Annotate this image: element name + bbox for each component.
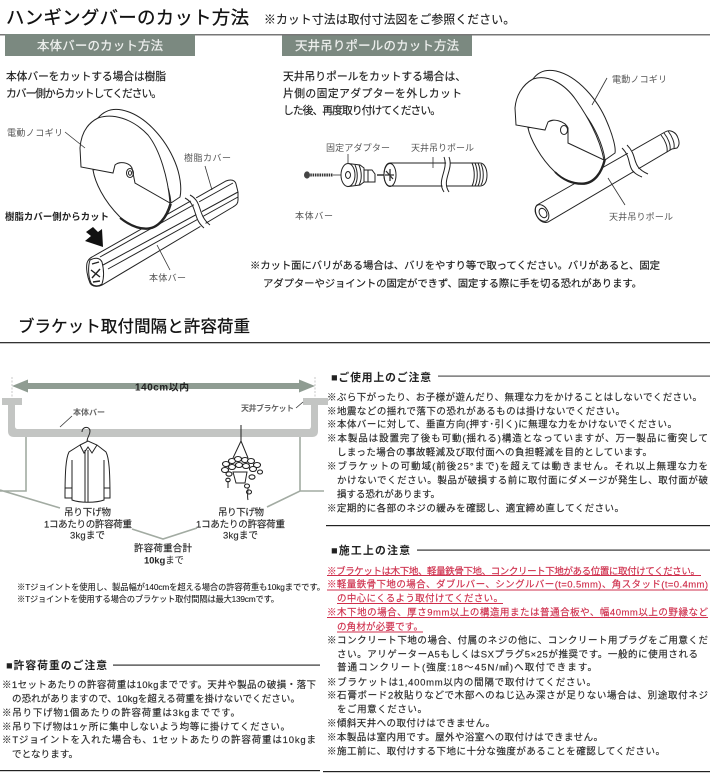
- label: ceiling pole right: [608, 178, 673, 222]
- heading: ■ご使用上のご注意: [331, 370, 431, 384]
- panel: installation cautions: ※本製品は室内用です。屋外や浴室への取付けはできません。: [327, 732, 603, 744]
- panel: load cautions: でとなります。: [12, 750, 78, 760]
- panel: load cautions: ※吊り下げ物1個あたりの許容荷重は3kgまでです。: [2, 707, 240, 719]
- label: electric saw left: [7, 128, 85, 148]
- label: main bar in diagram: [60, 407, 105, 427]
- label: item load right: 3kgまで: [223, 530, 258, 542]
- illustration: saw cutting main bar: [80, 109, 238, 286]
- label: main bar: 本体バー: [149, 272, 186, 283]
- panel: load cautions: の恐れがありますので、10kgを超える荷重を掛けないでください。: [12, 693, 300, 705]
- text block: pole cutting instruction: [283, 69, 466, 117]
- note: cut dimensions reference: ※カット寸法は取付寸法図をご参照ください。: [264, 12, 515, 26]
- label: item load right: [196, 506, 285, 542]
- pole: [384, 163, 487, 186]
- panel: installation cautions: をご用意ください。: [337, 704, 427, 716]
- panel: installation cautions: さい。アリゲーターA5もしくはSXプラグ5×25が推奨です。一般的に使用される: [337, 648, 698, 660]
- note: T joint: [17, 582, 325, 604]
- label: cut from resin cover side: 樹脂カバー側からカット: [5, 211, 109, 222]
- label: resin cover: [184, 152, 231, 190]
- heading: ■施工上の注意: [331, 543, 410, 557]
- text block: pole cutting instruction: した後、再度取り付けてください。: [283, 103, 441, 117]
- saw guard face: [80, 116, 170, 203]
- panel: load cautions: ※吊り下げ物は1ヶ所に集中しないよう均等に掛けてください。: [2, 721, 290, 733]
- label: total load: [134, 542, 192, 566]
- panel heading: ceiling pole cutting: 天井吊りポールのカット方法: [295, 38, 459, 53]
- red warnings: ※木下地の場合、厚さ9mm以上の構造用または普通合板や、幅40mm以上の野縁など: [327, 606, 708, 618]
- label: item load left: 3kgまで: [70, 530, 105, 542]
- panel: usage cautions: ※本体バーに対して、垂直方向(押す･引く)に無理な力をかけないでください。: [327, 418, 677, 430]
- panel: load cautions: [0, 658, 320, 771]
- label: item load right: 1コあたりの許容荷重: [196, 518, 285, 530]
- label: item load left: 吊り下げ物: [64, 506, 111, 518]
- blade: [528, 118, 604, 183]
- panel: load cautions: ※Tジョイントを入れた場合も、1セットあたりの許容荷重は10kgま: [2, 734, 316, 746]
- label: main bar parts: 本体バー: [295, 210, 333, 221]
- text block: bar cutting instruction: カバー側からカットしてください。: [6, 87, 162, 100]
- label: electric saw left: 電動ノコギリ: [7, 128, 63, 138]
- label: ceiling bracket: [241, 402, 303, 413]
- connector lines: [0, 437, 324, 539]
- label: item load right: 吊り下げ物: [218, 506, 264, 518]
- panel heading: bar cutting: 本体バーのカット方法: [37, 38, 163, 53]
- panel: installation cautions: ※コンクリート下地の場合、付属のネジの他に、コンクリート用プラグをご用意くだ: [327, 634, 708, 646]
- label: resin cover: 樹脂カバー: [184, 152, 231, 163]
- heading: ■許容荷重のご注意: [6, 658, 107, 672]
- panel: usage cautions: ※定期的に各部のネジの緩みを確認し、適宜締め直してください。: [327, 502, 624, 514]
- label: main bar: [149, 245, 186, 283]
- red warnings: の角材が必要です。: [337, 621, 423, 633]
- text block: bar cutting instruction: [6, 69, 166, 100]
- label: ceiling pole right: 天井吊りポール: [609, 211, 673, 222]
- adapter: [348, 164, 364, 186]
- panel: load cautions: ※1セットあたりの許容荷重は10kgまでです。天井や製品の破損・落下: [2, 679, 316, 691]
- icon: shirt on hanger: [65, 427, 110, 502]
- label: main bar in diagram: 本体バー: [73, 407, 105, 417]
- label: fixed adapter: [326, 142, 390, 164]
- text block: bar cutting instruction: 本体バーをカットする場合は樹脂: [6, 69, 166, 83]
- panel: usage cautions: かけないでください。製品が破損する前に取付面にダメージが発生し、取付面が破: [337, 474, 708, 486]
- panel: usage cautions: ※地震などの揺れで落下の恐れがあるものは掛けないでください。: [327, 406, 625, 418]
- red warnings: の中心にくるよう取付けてください。: [337, 592, 503, 604]
- panel: installation cautions: ※ブラケットは1,400mm以内の間隔で取付けてください。: [327, 676, 596, 688]
- panel: usage cautions: しまった場合の事故軽減及び取付面への負担軽減を目的としています。: [337, 446, 652, 458]
- label: total load: 10kgまで: [144, 556, 184, 566]
- note: burr warning: [250, 259, 660, 290]
- screw: [308, 174, 333, 176]
- saw guard rim: [533, 70, 615, 160]
- title: bracket spacing and load: ブラケット取付間隔と許容荷重: [18, 317, 250, 336]
- note: T joint: ※Tジョイントを使用し、製品幅が140cmを超える場合の許容荷重も10kgまでです。: [17, 582, 325, 592]
- label: electric saw right: 電動ノコギリ: [612, 74, 667, 84]
- panel: usage cautions: ※ブラケットの可動域(前後25°まで)を超えては動きません。それ以上無理な力を: [327, 460, 708, 472]
- label: ceiling bracket: 天井ブラケット: [241, 403, 294, 413]
- arrow: cut direction: [85, 227, 103, 247]
- dimension label: 140cm以内: [135, 380, 189, 394]
- diagram: bracket and bar: [2, 377, 328, 437]
- label: item load left: 1コあたりの許容荷重: [44, 518, 132, 530]
- panel: installation cautions: ※施工前に、取付けする下地に十分な強度があることを確認してください。: [327, 746, 665, 758]
- icon: hanging plant: [222, 425, 262, 500]
- blade: [93, 160, 170, 228]
- pole: [535, 131, 679, 223]
- panel: usage cautions: 損する恐れがあります。: [337, 488, 440, 500]
- panel heading: bar cutting: [5, 34, 195, 56]
- bar: [87, 180, 238, 286]
- label: item load left: [44, 506, 132, 542]
- note: burr warning: アダプターやジョイントの固定ができず、固定する際に手を切る恐れがあります。: [263, 277, 642, 290]
- saw guard face: [515, 78, 604, 160]
- gray bar and brackets: [2, 398, 328, 437]
- note: T joint: ※Tジョイントを使用する場合のブラケット取付間隔は最大139cmです。: [17, 594, 279, 604]
- bar end cap: [89, 258, 104, 286]
- label: electric saw right: [592, 74, 667, 105]
- title: hanging bar cutting: ハンギングバーのカット方法: [6, 7, 249, 28]
- label: total load: 許容荷重合計: [134, 542, 192, 554]
- red warnings: ※ブラケットは木下地、軽量鉄骨下地、コンクリート下地がある位置に取付けてください。: [327, 566, 700, 578]
- panel: installation cautions: ※石膏ボード2枚貼りなどで木部へのねじ込み深さが足りない場合は、別途取付ネジ: [327, 690, 708, 702]
- saw guard rim: [98, 109, 181, 203]
- note: burr warning: ※カット面にバリがある場合は、バリをやすり等で取ってください。バリがあると、固定: [250, 259, 660, 272]
- panel heading: ceiling pole cutting: [282, 36, 472, 56]
- illustration: exploded pole parts: [304, 157, 487, 192]
- illustration: saw cutting pole: [515, 70, 679, 224]
- dimension arrow: [12, 380, 315, 392]
- label: fixed adapter: 固定アダプター: [326, 142, 390, 153]
- red warnings: [327, 566, 708, 633]
- panel: installation cautions: 普通コンクリート(強度:18～45N/㎟)へ取付できます。: [337, 662, 597, 674]
- text block: pole cutting instruction: 天井吊りポールをカットする場合は、: [283, 69, 466, 83]
- panel: installation cautions: ※傾斜天井への取付けはできません。: [327, 718, 495, 730]
- panel: usage cautions: ※ぶら下がったり、お子様が遊んだり、無理な力をかけることはしないでください。: [327, 392, 702, 404]
- panel: installation cautions: [323, 543, 710, 772]
- text block: pole cutting instruction: 片側の固定アダプターを外しカット: [283, 86, 462, 100]
- panel: usage cautions: ※本製品は設置完了後も可動(揺れる)構造となっていますが、万一製品に衝突して: [327, 432, 708, 444]
- red warnings: ※軽量鉄骨下地の場合、ダブルバー、シングルバー(t=0.5mm)、角スタッド(t=0.4mm): [327, 578, 708, 590]
- panel: usage cautions: [326, 370, 710, 526]
- label: ceiling pole parts: 天井吊りポール: [411, 142, 474, 153]
